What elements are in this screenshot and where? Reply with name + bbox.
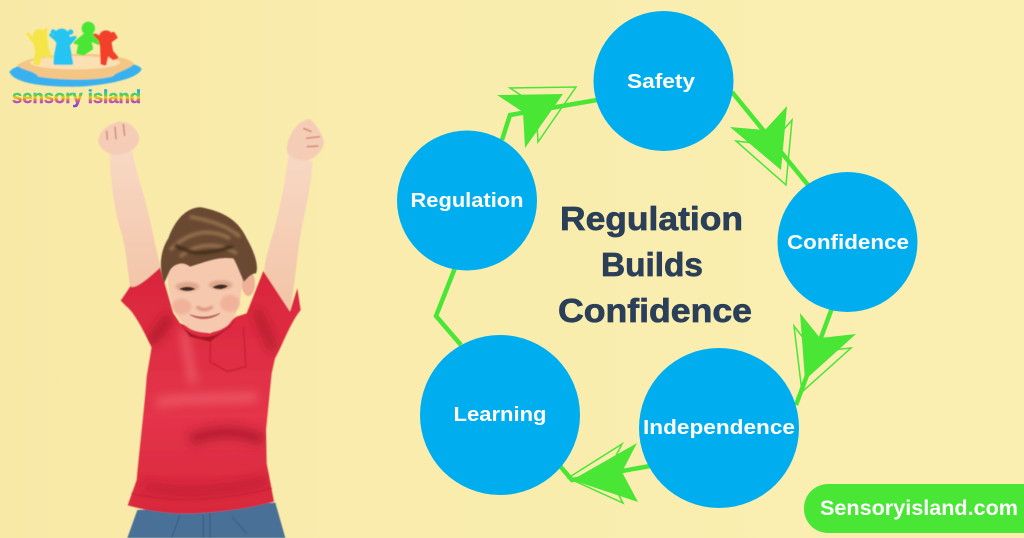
node: Confidence — [778, 172, 918, 312]
node: Safety: Safety — [627, 71, 696, 93]
node: Regulation: Regulation — [410, 190, 524, 212]
cycle connector: Safety to Confidence — [730, 92, 808, 185]
node: Regulation — [397, 130, 537, 270]
jeans — [127, 503, 285, 538]
shirt collar — [180, 318, 237, 342]
website badge — [804, 484, 1024, 533]
logo wordmark: sensory island — [12, 87, 141, 107]
cycle connector: Learning to Regulation — [436, 268, 461, 345]
face — [167, 253, 242, 333]
cycle connector: Confidence to Independence — [794, 308, 856, 405]
website badge: Sensoryisland.com — [820, 497, 1018, 520]
title: Regulation Builds Confidence: Confidence — [558, 292, 752, 329]
eyes — [179, 287, 195, 291]
hair strands — [170, 217, 240, 257]
shirt shading — [145, 310, 273, 491]
hair — [161, 207, 257, 283]
title: Regulation Builds Confidence — [558, 200, 752, 329]
node: Learning: Learning — [454, 404, 546, 426]
cycle connector: Independence to Learning — [560, 443, 650, 503]
ear — [242, 271, 255, 296]
left fist — [98, 121, 139, 155]
logo icon: children on island — [9, 22, 142, 87]
shirt pocket — [210, 327, 246, 372]
nose shadow — [197, 307, 213, 310]
node: Learning — [420, 335, 580, 495]
photo: cheering boy in red shirt — [98, 119, 324, 538]
shirt hem — [132, 488, 272, 499]
logo: Sensory Island — [9, 22, 142, 107]
eye shadows — [175, 282, 199, 291]
node: Independence: Independence — [643, 417, 795, 439]
node: Confidence: Confidence — [787, 232, 909, 254]
node: Safety — [594, 11, 734, 151]
right fist — [287, 119, 324, 161]
title: Regulation Builds Confidence: Regulation — [560, 200, 743, 237]
title: Regulation Builds Confidence: Builds — [601, 246, 703, 283]
mouth — [190, 313, 220, 319]
node: Independence — [639, 348, 799, 508]
right arm — [265, 155, 313, 312]
left arm — [110, 152, 162, 298]
red shirt — [121, 268, 301, 514]
cycle connector: Regulation to Safety — [497, 87, 597, 148]
